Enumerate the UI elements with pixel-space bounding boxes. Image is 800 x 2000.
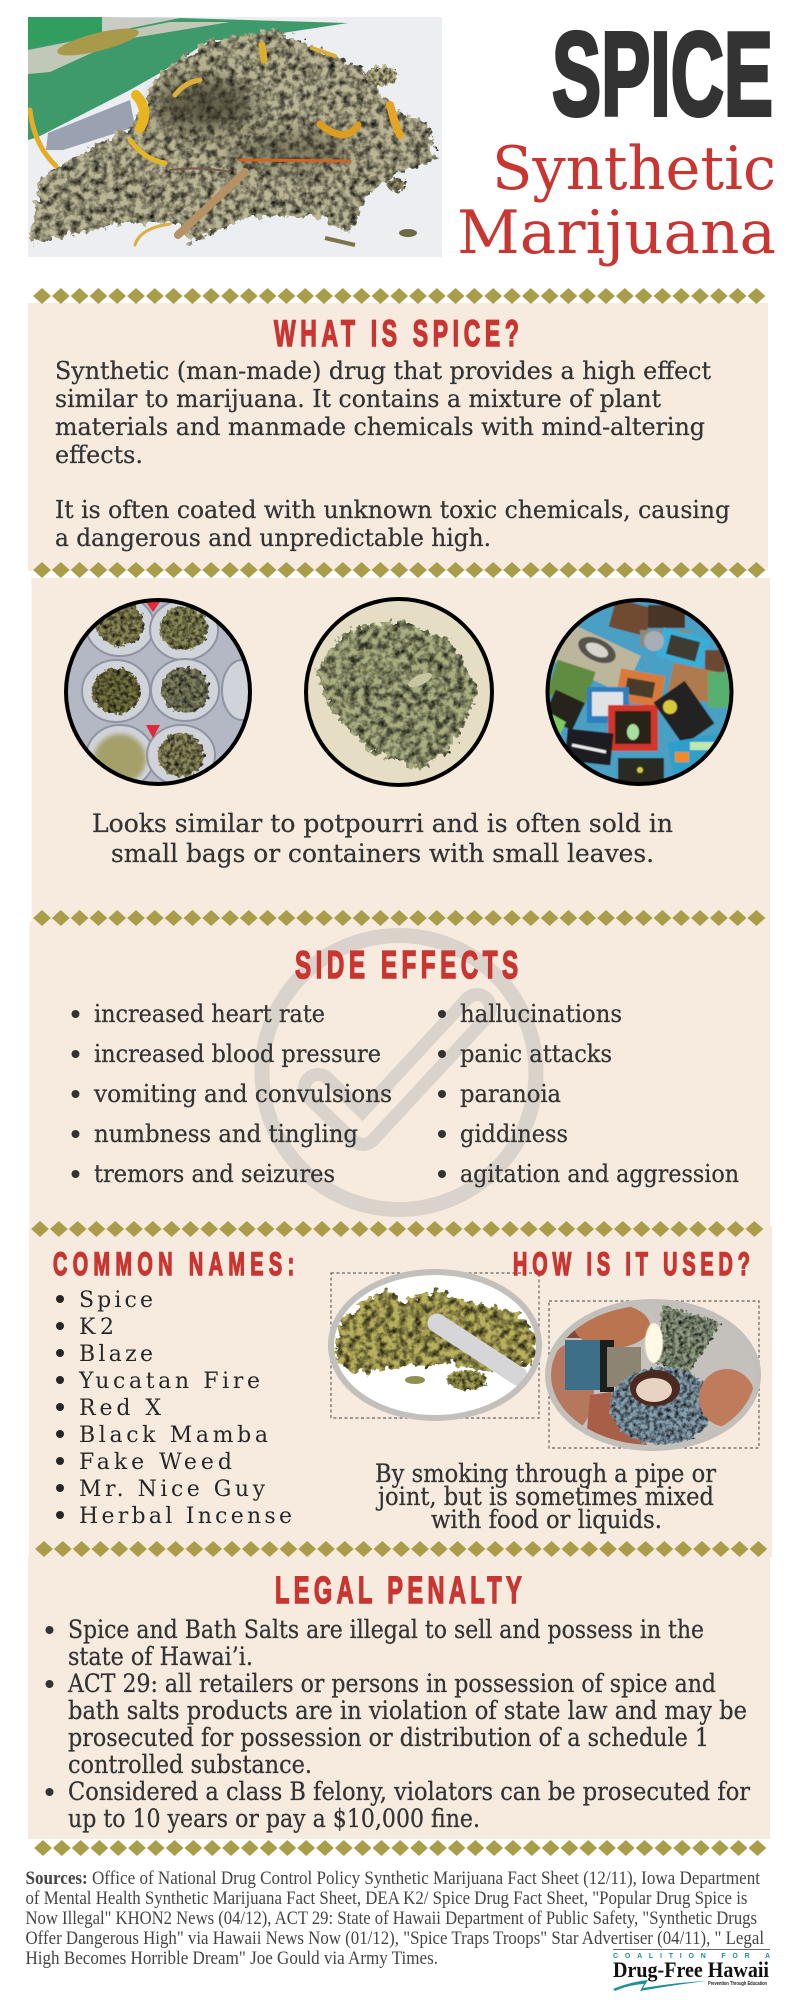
panel: side effects — [30, 922, 770, 1226]
list: side effects column 2: agitation and aggression — [460, 1160, 739, 1188]
list: legal penalties: Spice and Bath Salts are illegal to sell and possess in the — [68, 1615, 704, 1644]
logo: Coalition for a Drug-Free Hawaii: Prevention Through Education — [708, 1981, 767, 1987]
list: legal penalties: prosecuted for possession or distribution of a schedule 1 — [68, 1723, 709, 1752]
list: side effects column 2: paranoia — [460, 1080, 561, 1108]
diamond dividers — [31, 288, 768, 1856]
text block: definition: materials and manmade chemicals with mind-altering — [55, 413, 705, 441]
list: side effects column 2: giddiness — [460, 1120, 568, 1148]
list: side effects column 1 — [72, 1000, 392, 1188]
text block: how it is used — [375, 1459, 716, 1534]
list: common names: Mr. Nice Guy — [79, 1477, 266, 1502]
icon: watermark check mark in circle — [262, 936, 536, 1210]
text block: how it is used: with food or liquids. — [431, 1505, 662, 1534]
list: common names: Herbal Incense — [79, 1504, 292, 1529]
list: common names: K2 — [79, 1315, 114, 1340]
list: legal penalties: state of Hawai’i. — [68, 1642, 253, 1671]
list: side effects column 1: tremors and seizures — [94, 1160, 335, 1188]
heading: legal penalty: LEGAL PENALTY — [275, 1568, 522, 1611]
text block: sources — [26, 1868, 764, 1969]
list: legal penalties: bath salts products are in violation of state law and may be — [68, 1696, 747, 1725]
heading: how is it used: HOW IS IT USED? — [513, 1246, 750, 1282]
panel: legal penalty — [28, 1557, 770, 1839]
photo: spice in round containers — [64, 598, 252, 786]
list: side effects column 1: increased blood pressure — [94, 1040, 381, 1068]
list: common names: Blaze — [79, 1342, 153, 1367]
text block: definition: Synthetic (man-made) drug that provides a high effect — [55, 357, 711, 385]
caption: looks similar to potpourri: Looks similar to potpourri and is often sold in — [92, 809, 673, 838]
subtitle: Synthetic Marijuana: Synthetic — [492, 134, 776, 204]
heading: side effects: SIDE EFFECTS — [295, 943, 518, 986]
list: legal penalties: up to 10 years or pay a $10,000 fine. — [68, 1804, 480, 1833]
logo: Coalition for a Drug-Free Hawaii — [613, 1949, 770, 1991]
text block: sources: High Becomes Horrible Dream" Joe Gould via Army Times. — [26, 1948, 438, 1969]
text block: definition: effects. — [55, 441, 143, 469]
heading: what is spice: WHAT IS SPICE? — [274, 312, 519, 354]
logo: Coalition for a Drug-Free Hawaii: COALITION FOR A — [613, 1953, 770, 1960]
text block: definition: similar to marijuana. It contains a mixture of plant — [55, 385, 661, 413]
subtitle: Synthetic Marijuana — [457, 134, 776, 268]
photo: lighting a glass pipe — [545, 1298, 761, 1455]
caption: looks similar to potpourri: small bags or containers with small leaves. — [111, 839, 654, 868]
list: side effects column 1: vomiting and convulsions — [93, 1080, 392, 1108]
list: legal penalties — [46, 1615, 750, 1833]
text block: how it is used: By smoking through a pipe or — [375, 1459, 716, 1488]
list: common names: Black Mamba — [79, 1423, 268, 1448]
photo: joint on dried herb — [325, 1268, 545, 1423]
list: side effects column 1: increased heart rate — [94, 1000, 325, 1028]
text block: how it is used: joint, but is sometimes mixed — [375, 1482, 714, 1511]
panel: appearance — [32, 578, 770, 922]
list: common names: Spice — [79, 1288, 153, 1313]
list: legal penalties: ACT 29: all retailers or persons in possession of spice and — [67, 1669, 716, 1698]
list: common names: Red X — [79, 1396, 161, 1421]
list: side effects column 1: numbness and tingling — [94, 1120, 358, 1148]
list: legal penalties: controlled substance. — [68, 1750, 312, 1779]
heading: common names: COMMON NAMES: — [53, 1246, 294, 1282]
logo: Coalition for a Drug-Free Hawaii: Drug-Free Hawaii — [613, 1957, 769, 1982]
list: common names — [56, 1288, 292, 1529]
list: side effects column 2 — [438, 1000, 739, 1188]
text block: definition: a dangerous and unpredictable high. — [55, 524, 491, 552]
list: side effects column 2: panic attacks — [460, 1040, 612, 1068]
dashed frames behind usage photos — [331, 1273, 759, 1448]
text block: definition — [55, 357, 730, 552]
photo: assorted colourful packets — [543, 598, 735, 790]
panel: common names and usage — [29, 1226, 772, 1557]
photo: spice spilling from a green packet — [28, 17, 442, 257]
list: side effects column 2: hallucinations — [460, 1000, 622, 1028]
panel: what is spice — [28, 303, 768, 571]
text block: definition: It is often coated with unknown toxic chemicals, causing — [55, 496, 730, 524]
subtitle: Synthetic Marijuana: Marijuana — [457, 198, 776, 268]
caption: looks similar to potpourri — [92, 809, 673, 868]
list: common names: Fake Weed — [79, 1450, 232, 1475]
photo: loose dried leaves — [300, 595, 500, 790]
list: common names: Yucatan Fire — [78, 1369, 260, 1394]
